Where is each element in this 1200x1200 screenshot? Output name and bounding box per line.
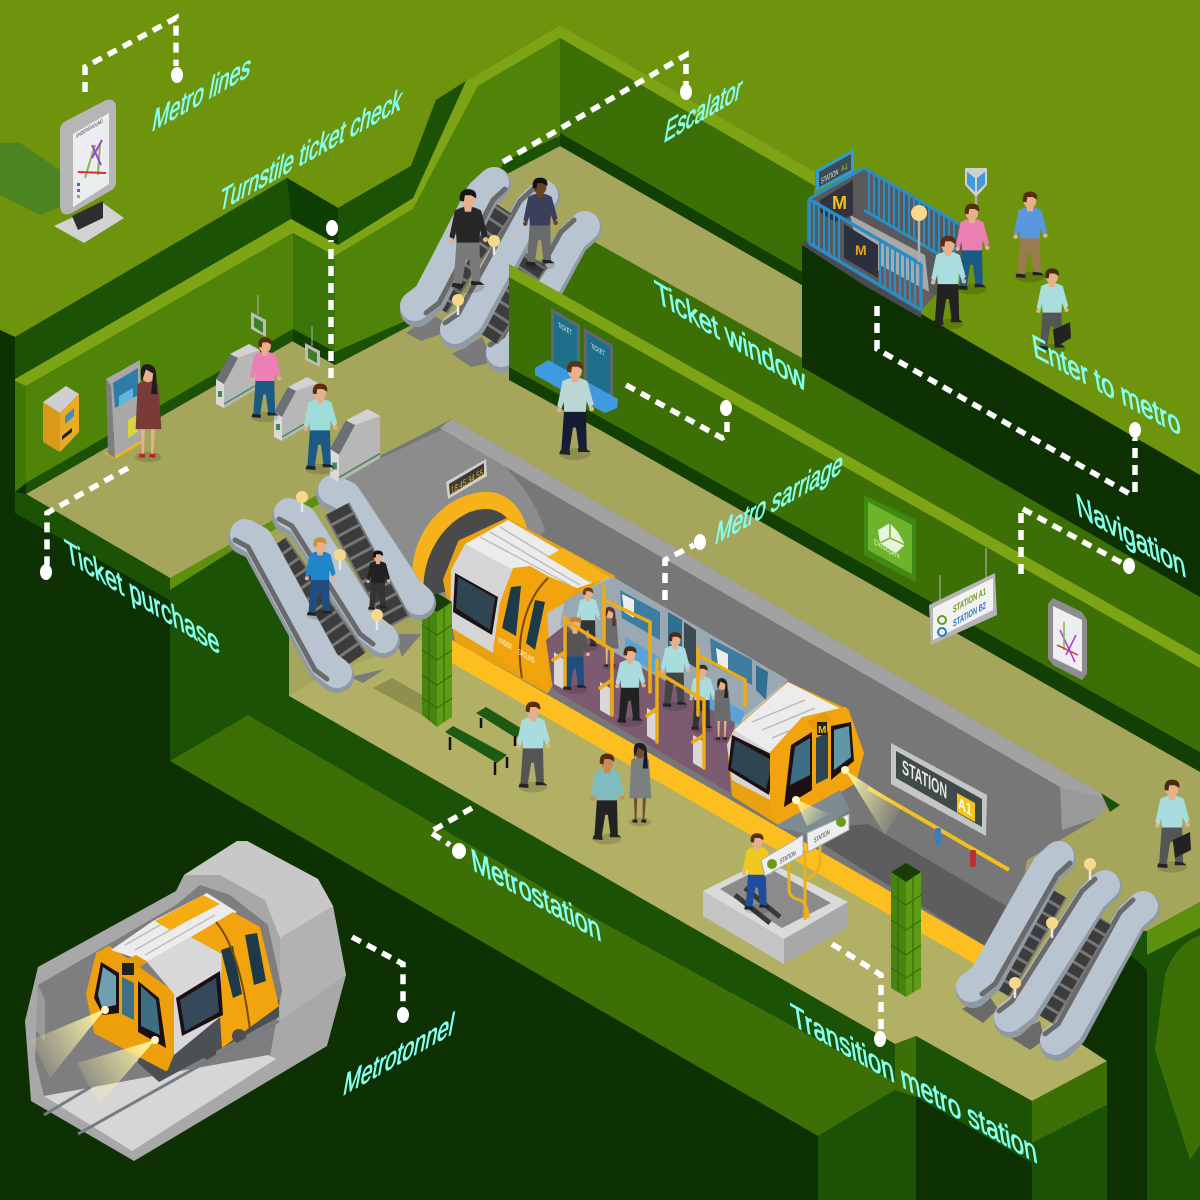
turnstile 2 xyxy=(274,377,318,441)
pink shirt man xyxy=(955,204,990,294)
dashed connector: metrostation xyxy=(430,808,472,859)
dashed connector: turnstile xyxy=(326,220,338,378)
people at turnstiles xyxy=(249,337,338,474)
briefcase right xyxy=(1173,832,1191,858)
man on phone xyxy=(1036,268,1069,354)
hanging station sign xyxy=(929,548,997,645)
passenger seated man xyxy=(689,665,715,733)
metro lines billboard: UNDERGROUND xyxy=(76,118,103,140)
lower left walls and ledge xyxy=(170,540,1200,1200)
man in light blue xyxy=(303,384,338,474)
label: ticket window: Ticket window xyxy=(652,272,808,399)
passenger standing back xyxy=(576,588,600,651)
clock display: 18:45:34 55 xyxy=(451,467,483,497)
turnstile 1 xyxy=(216,344,260,408)
tunnel inner xyxy=(35,885,282,1096)
dashed connector: metro lines xyxy=(85,18,183,92)
train: left car: GROUND xyxy=(518,647,535,666)
tunnel train front windows xyxy=(94,962,119,1015)
escalator: lower-left group xyxy=(235,490,421,683)
upper floor right edge wall top xyxy=(509,231,1200,665)
woman at ATM xyxy=(135,364,161,462)
dark block under surface xyxy=(802,245,1200,597)
station floor xyxy=(26,146,1200,1101)
metro entrance stairs: A1 xyxy=(841,161,848,174)
arch: tunnel portal xyxy=(412,492,527,598)
passenger bearded xyxy=(661,632,690,711)
clock display xyxy=(446,459,487,499)
platform passengers xyxy=(516,702,1190,873)
wayfinding signs: STATION xyxy=(780,850,796,866)
ticket wall strips xyxy=(509,264,1200,772)
train: left car xyxy=(445,520,613,691)
wall sign: logo: Descpex xyxy=(874,537,900,561)
people on lower-left escalators xyxy=(305,537,390,620)
fence front xyxy=(809,199,921,310)
lamps on escalators xyxy=(296,235,1096,998)
M panel xyxy=(820,180,853,222)
dashed connector: escalator xyxy=(503,55,692,162)
man in navy suit xyxy=(523,178,558,271)
escalator: lower-right group xyxy=(962,856,1143,1050)
floor shadow beside pillar xyxy=(373,678,422,715)
tunnel train wheels xyxy=(202,1046,216,1060)
wayfinding signs: STATION xyxy=(814,829,830,845)
train: right car xyxy=(727,682,862,835)
man in pink xyxy=(249,337,281,422)
street lamp xyxy=(911,205,927,262)
train headlights xyxy=(792,766,902,835)
metro tunnel wall xyxy=(325,419,1120,946)
wall sign: logo xyxy=(864,495,916,582)
benches xyxy=(445,707,524,775)
label: metro sarriage: Metro sarriage xyxy=(713,444,846,552)
front panel xyxy=(844,224,878,278)
train: cut-away interior xyxy=(546,577,788,793)
dashed connector: navigation xyxy=(1021,508,1135,574)
metro lines billboard xyxy=(0,100,124,243)
hanging station sign: STATION B2 xyxy=(953,600,986,630)
metro entrance stairs: M xyxy=(832,193,847,213)
passenger seated lady xyxy=(713,678,731,743)
passenger near bench xyxy=(516,702,551,792)
label: transition metro station: Transition metro station xyxy=(788,995,1039,1171)
man on stairs xyxy=(742,833,773,914)
station name sign: A1 xyxy=(958,795,972,820)
metro entrance stairs xyxy=(802,149,962,318)
passenger with back turned xyxy=(590,754,625,844)
label: metrotonnel: Metrotonnel xyxy=(341,1005,457,1103)
lower platform floor xyxy=(289,640,1107,1101)
dashed connector: metro carriage xyxy=(665,534,706,600)
escalator: top group xyxy=(406,182,585,367)
turnstile arrow signs xyxy=(251,295,320,367)
passenger seated woman xyxy=(601,607,619,670)
metro entrance stairs: M xyxy=(855,242,867,258)
dashed connector: metrotunnel xyxy=(352,937,409,1023)
dashed connector: ticket window xyxy=(626,385,732,438)
label: escalator: Escalator xyxy=(662,69,745,150)
ticket window: TICKET xyxy=(591,343,605,358)
woman with orange bag xyxy=(305,537,336,620)
passenger centre xyxy=(615,646,646,727)
label: metro lines: Metro lines xyxy=(150,46,254,139)
tunnel headlights xyxy=(31,1009,105,1078)
man at railing xyxy=(931,236,966,330)
ticket window wall xyxy=(509,264,1200,752)
metro line map strip xyxy=(868,788,1009,870)
pillar right xyxy=(891,863,921,997)
metro tunnel cutaway xyxy=(25,841,346,1161)
woman in grey coat xyxy=(629,743,651,827)
people on top escalators xyxy=(449,178,558,293)
left rock wall xyxy=(0,330,15,513)
tunnel train base xyxy=(138,1000,279,1082)
blue shirt man xyxy=(1013,192,1048,282)
wall poster: metro map xyxy=(1048,598,1087,680)
surface ground xyxy=(0,0,1200,478)
station name sign xyxy=(891,743,987,836)
label: ticket purchase: Ticket purchase xyxy=(62,531,222,662)
floor edge strips xyxy=(15,133,802,600)
label: metrostation: Metrostation xyxy=(468,840,603,949)
station name sign: STATION xyxy=(902,756,947,804)
hanging station sign: STATION A1 xyxy=(953,586,986,616)
upper wall faces xyxy=(15,25,815,492)
passengers inside train xyxy=(561,588,731,743)
man with briefcase on phone xyxy=(1155,780,1190,873)
train: left car: UNDER xyxy=(498,635,512,652)
man at ticket window xyxy=(557,361,594,460)
pillar left xyxy=(422,593,452,727)
dashed connector: enter to metro xyxy=(877,306,1141,494)
label: turnstile ticket check: Turnstile ticket check xyxy=(217,80,406,219)
train: right car: M xyxy=(818,725,826,736)
ticket vending machine xyxy=(43,386,79,452)
ATM kiosk xyxy=(104,360,142,459)
fence back xyxy=(809,168,962,268)
ticket window xyxy=(535,308,618,413)
ticket window: TICKET xyxy=(558,322,572,337)
tunnel outer shell xyxy=(25,841,346,1161)
metro entrance stairs: STATION xyxy=(821,167,838,186)
wayfinding signs xyxy=(761,814,849,920)
train grab poles xyxy=(553,586,745,768)
metro pole sign xyxy=(965,168,987,212)
dashed connector: ticket purchase xyxy=(40,468,128,580)
tunnel train body xyxy=(88,948,178,1069)
platform yellow edge xyxy=(452,640,985,964)
stair exit with signs xyxy=(703,860,848,964)
man in black jacket xyxy=(449,189,488,293)
turnstiles xyxy=(216,344,380,482)
tunnel rails xyxy=(44,1021,279,1134)
dashed connector: transition xyxy=(832,944,886,1047)
passenger with orange bag xyxy=(561,617,590,694)
station A1 sign xyxy=(816,149,854,191)
briefcase xyxy=(1053,322,1071,347)
man in black xyxy=(367,550,390,613)
people at surface xyxy=(931,192,1069,354)
turnstile 3 xyxy=(330,409,380,482)
